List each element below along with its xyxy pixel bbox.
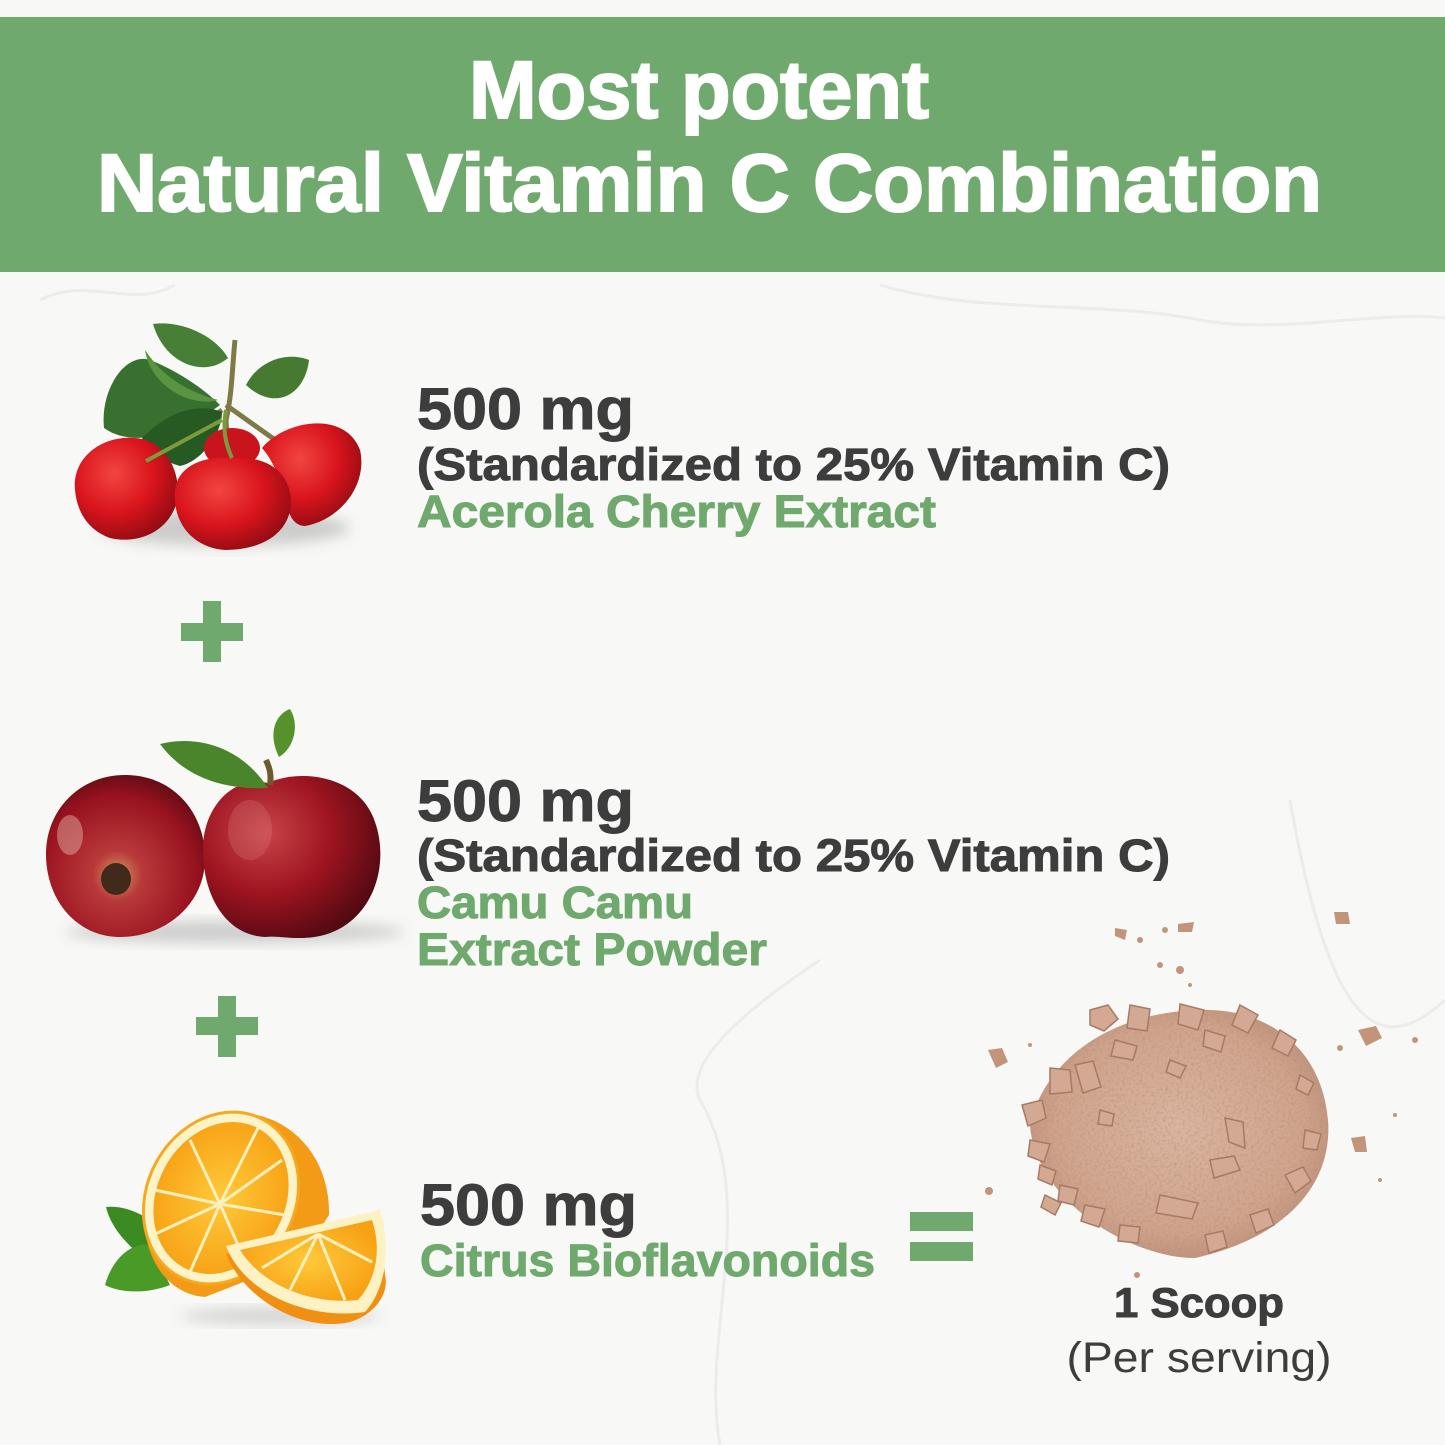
icon: acerola cherries xyxy=(75,323,361,550)
text block: citrus: Citrus Bioflavonoids xyxy=(420,1235,875,1286)
text block: acerola: 500 mg xyxy=(417,377,634,442)
scoop label: (Per serving) xyxy=(1066,1334,1332,1382)
icon: powder pile xyxy=(985,912,1418,1278)
icon: plus two xyxy=(196,996,258,1057)
text block: camu camu: (Standardized to 25% Vitamin C) xyxy=(417,830,1170,881)
scoop label xyxy=(1066,1279,1332,1382)
text block: citrus: 500 mg xyxy=(420,1173,637,1238)
icon: equals sign xyxy=(910,1212,973,1261)
icon: orange xyxy=(105,1085,386,1324)
text block: acerola xyxy=(417,377,1170,537)
text block: camu camu: Extract Powder xyxy=(417,924,767,975)
title banner xyxy=(0,17,1445,272)
icon: camu camu fruits xyxy=(46,709,405,943)
text block: citrus xyxy=(420,1173,875,1286)
title: Most potent xyxy=(469,45,929,136)
scoop label: 1 Scoop xyxy=(1114,1279,1284,1326)
powder chunks xyxy=(1022,1004,1321,1253)
text block: camu camu: Camu Camu xyxy=(417,877,693,928)
title: Natural Vitamin C Combination xyxy=(97,138,1322,229)
text block: camu camu: 500 mg xyxy=(417,769,634,834)
title xyxy=(97,45,1322,229)
text block: acerola: (Standardized to 25% Vitamin C) xyxy=(417,439,1170,490)
icon: plus one xyxy=(181,601,243,662)
powder crumbs xyxy=(985,912,1418,1278)
text block: acerola: Acerola Cherry Extract xyxy=(417,486,936,537)
text block: camu camu xyxy=(417,769,1170,975)
